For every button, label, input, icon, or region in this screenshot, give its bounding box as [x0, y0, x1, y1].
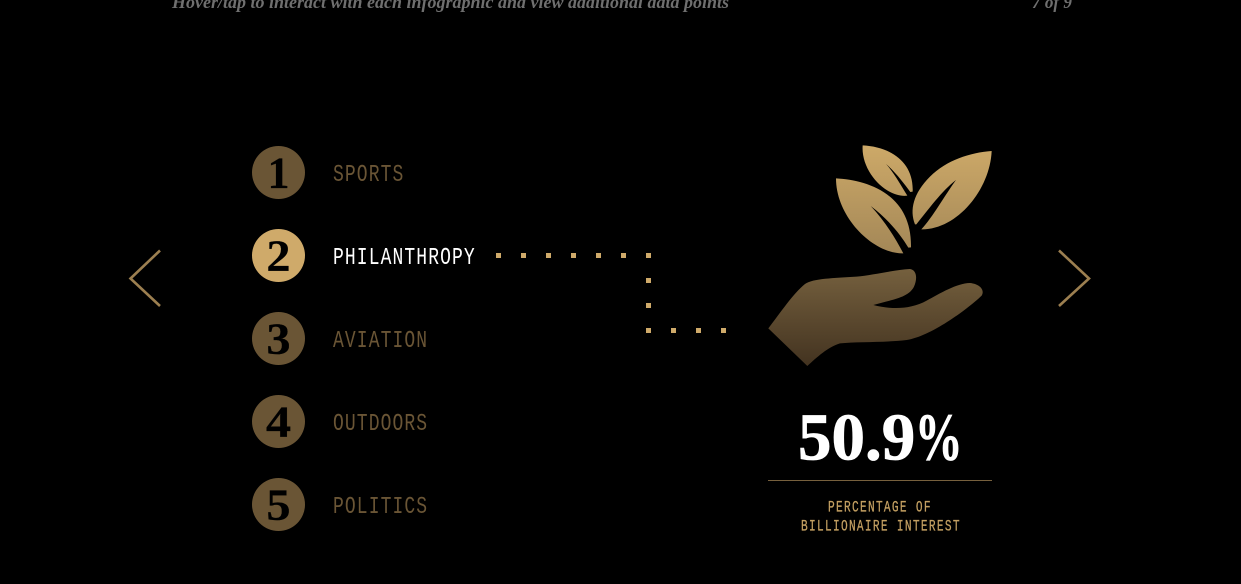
- caption: percentage of billionaire interest: BILLIONAIRE INTEREST: [801, 519, 961, 536]
- divider line: [768, 480, 992, 481]
- caption: percentage of billionaire interest: PERCENTAGE OF: [828, 500, 932, 517]
- list item 3: aviation: AVIATION: [333, 328, 428, 355]
- list item 3: aviation: [252, 312, 428, 365]
- list item 1: sports: [252, 146, 404, 199]
- statistic: 50.9%: 50.9: [798, 400, 915, 474]
- list item 3: aviation: 3: [266, 315, 291, 364]
- arrow: next: [1059, 250, 1089, 306]
- icon: hand holding leaves: [768, 145, 992, 366]
- list item 4: outdoors: 4: [266, 398, 291, 447]
- list item 1: sports: 1: [268, 148, 290, 198]
- list item 1: sports: SPORTS: [333, 162, 404, 189]
- list item 2: philanthropy active: PHILANTHROPY: [333, 245, 476, 272]
- list item 4: outdoors: [252, 395, 428, 448]
- list item 2: philanthropy active: 2: [266, 232, 291, 281]
- list item 5: politics: 5: [266, 481, 291, 530]
- arrow: previous: [130, 250, 160, 306]
- statistic: 50.9%: %: [915, 400, 963, 474]
- list item 4: outdoors: OUTDOORS: [333, 411, 428, 438]
- dotted connector: [496, 253, 726, 333]
- list item 5: politics: [252, 478, 428, 531]
- list item 2: philanthropy active: [252, 229, 476, 282]
- caption: percentage of billionaire interest: [801, 500, 961, 536]
- list item 5: politics: POLITICS: [333, 494, 428, 521]
